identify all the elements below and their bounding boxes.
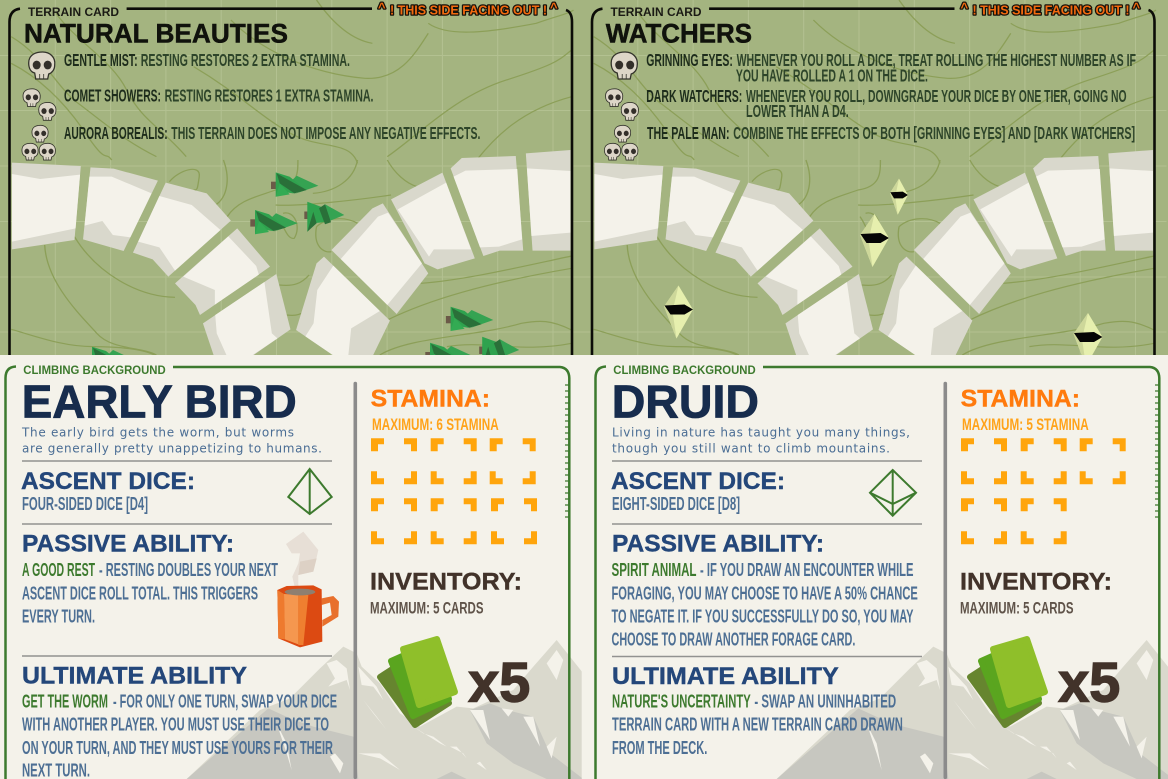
panel: terrain card watchers [582,0,1166,357]
section: ultimate ability: FROM THE DECK. [612,738,707,758]
section: stamina: STAMINA: [371,387,490,413]
section: stamina: MAXIMUM: 5 STAMINA [962,415,1089,434]
title: watchers: WATCHERS [606,19,752,49]
stamina tracker: six slots [371,438,537,544]
section: ultimate ability: ULTIMATE ABILITY [22,663,247,689]
section: inventory [960,568,1112,617]
count: x5: x5 [1058,651,1120,714]
section: passive ability: PASSIVE ABILITY: [22,532,234,558]
section: inventory: INVENTORY: [960,568,1112,595]
section: passive ability: SPIRIT ANIMAL [612,560,697,580]
section: passive ability [612,532,918,650]
label: climbing background: CLIMBING BACKGROUND [23,365,166,377]
label: climbing background: CLIMBING BACKGROUND [613,365,756,377]
section: ultimate ability: NATURE'S UNCERTAINTY [612,692,751,712]
rule: the pale man [604,123,1135,160]
icon: four-sided die [288,469,332,514]
section: inventory: INVENTORY: [370,568,522,595]
rule: dark watchers: LOWER THAN A D4. [746,101,849,121]
section: ultimate ability: ULTIMATE ABILITY [612,664,839,690]
section: ultimate ability [612,664,903,758]
rule: aurora borealis: THIS TERRAIN DOES NOT IMPOSE ANY NEGATIVE EFFECTS. [171,123,480,143]
title: natural beauties: NATURAL BEAUTIES [24,19,288,49]
icon: card stack [380,639,455,725]
section: ascent dice: ASCENT DICE: [611,469,785,495]
rule: comet showers: RESTING RESTORES 1 EXTRA STAMINA. [165,86,374,106]
icon: card stack [970,639,1045,725]
section: passive ability: FORAGING, YOU MAY CHOOSE TO HAVE A 50% CHANCE [612,583,918,603]
count: x5: x5 [468,651,530,714]
flavor text: The early bird gets the worm, but worms [21,426,294,440]
section: ultimate ability [22,663,337,779]
rule: dark watchers [606,86,1127,121]
ruler ticks [1155,385,1159,517]
icon: three skulls [604,125,638,160]
section: passive ability: EVERY TURN. [22,607,95,627]
rule: gentle mist: GENTLE MIST: [64,50,138,70]
panel: climbing background early bird [6,365,583,779]
trail of stone path [12,150,571,357]
section: ascent dice: FOUR-SIDED DICE [D4] [22,494,148,514]
section: ultimate ability: GET THE WORM [22,691,108,711]
flavor text [612,426,910,455]
section: passive ability: CHOOSE TO DRAW ANOTHER FORAGE CARD. [612,630,855,650]
rule: dark watchers: DARK WATCHERS: [646,86,742,106]
rule: comet showers [23,86,374,120]
icon: one skull [611,52,637,79]
icon: watching eyes [664,179,1102,366]
label: terrain card: TERRAIN CARD [610,7,702,19]
rule: the pale man: THE PALE MAN: [647,123,730,143]
section: inventory [370,568,522,617]
section: passive ability: - IF YOU DRAW AN ENCOUNTER WHILE [700,560,914,580]
section: ascent dice: EIGHT-SIDED DICE [D8] [612,494,740,514]
column divider [354,382,357,779]
section: passive ability: PASSIVE ABILITY: [612,532,824,558]
section: ascent dice [21,469,195,514]
stamina tracker: five slots [961,438,1126,544]
icon: steaming mug [277,532,339,647]
rule: aurora borealis [22,123,480,160]
section: inventory: MAXIMUM: 5 CARDS [370,598,484,617]
rule: grinning eyes [611,50,1136,85]
section: passive ability: - RESTING DOUBLES YOUR NEXT [99,560,278,580]
rule: gentle mist: RESTING RESTORES 2 EXTRA STAMINA. [141,50,350,70]
title: early bird: EARLY BIRD [22,375,297,427]
warning: this side facing out: ^ [378,0,386,15]
section: passive ability: TO NEGATE IT. IF YOU SUCCESSFULLY DO SO, YOU MAY [612,607,914,627]
rule: aurora borealis: AURORA BOREALIS: [64,123,168,143]
panel: climbing background druid [596,365,1168,779]
title: druid: DRUID [612,375,759,427]
background: climbing background strip [0,355,1168,779]
rule: comet showers: COMET SHOWERS: [64,86,161,106]
background: terrain strip [0,0,1168,355]
rule: gentle mist [29,50,350,79]
section: ultimate ability: - FOR ONLY ONE TURN, SWAP YOUR DICE [113,691,337,711]
icon: two skulls [606,89,638,120]
flavor text: Living in nature has taught you many things, [612,426,910,440]
icon: eight-sided die [870,470,916,516]
column divider [944,382,947,779]
icon: one skull [29,52,55,79]
section: ultimate ability: ON YOUR TURN, AND THEY MUST USE YOURS FOR THEIR [22,738,333,758]
flavor text [21,426,322,455]
section: ultimate ability: WITH ANOTHER PLAYER. YOU MUST USE THEIR DICE TO [22,715,329,735]
icon: pine trees [87,172,519,371]
flavor text: though you still want to climb mountains. [612,441,890,455]
section: ultimate ability: - SWAP AN UNINHABITED [754,692,896,712]
card border [6,366,569,779]
section: passive ability [22,532,278,627]
section: passive ability: ASCENT DICE ROLL TOTAL. THIS TRIGGERS [22,583,258,603]
card border: natural beauties [10,9,572,355]
section: passive ability: A GOOD REST [22,560,95,580]
section: ascent dice [611,469,785,514]
icon: two skulls [23,89,56,120]
icon: three skulls [22,125,55,160]
warning: this side facing out: ^ [1132,0,1140,15]
section: ultimate ability: TERRAIN CARD WITH A NEW TERRAIN CARD DRAWN [612,715,903,735]
rule: grinning eyes: GRINNING EYES: [646,50,733,70]
card border [596,366,1159,779]
warning: this side facing out: ^ [960,0,968,15]
mountain illustration [777,640,1168,779]
mountain illustration [187,640,583,779]
rule: grinning eyes: YOU HAVE ROLLED A 1 ON THE DICE. [736,65,928,85]
section: inventory: MAXIMUM: 5 CARDS [960,598,1074,617]
panel: terrain card natural beauties [0,0,584,371]
section: stamina: STAMINA: [961,387,1080,413]
trail of stone path [594,150,1153,357]
section: stamina [371,387,499,434]
label: terrain card: TERRAIN CARD [28,7,119,19]
warning: this side facing out: ! THIS SIDE FACING OUT ! [390,3,547,18]
section: ascent dice: ASCENT DICE: [21,469,195,495]
warning: this side facing out: ! THIS SIDE FACING OUT ! [972,3,1130,18]
section: stamina [961,387,1089,434]
card border: watchers [592,9,1154,355]
section: stamina: MAXIMUM: 6 STAMINA [372,415,499,434]
ruler ticks [565,385,569,517]
flavor text: are generally pretty unappetizing to humans. [22,441,322,455]
warning: this side facing out: ^ [550,0,558,15]
